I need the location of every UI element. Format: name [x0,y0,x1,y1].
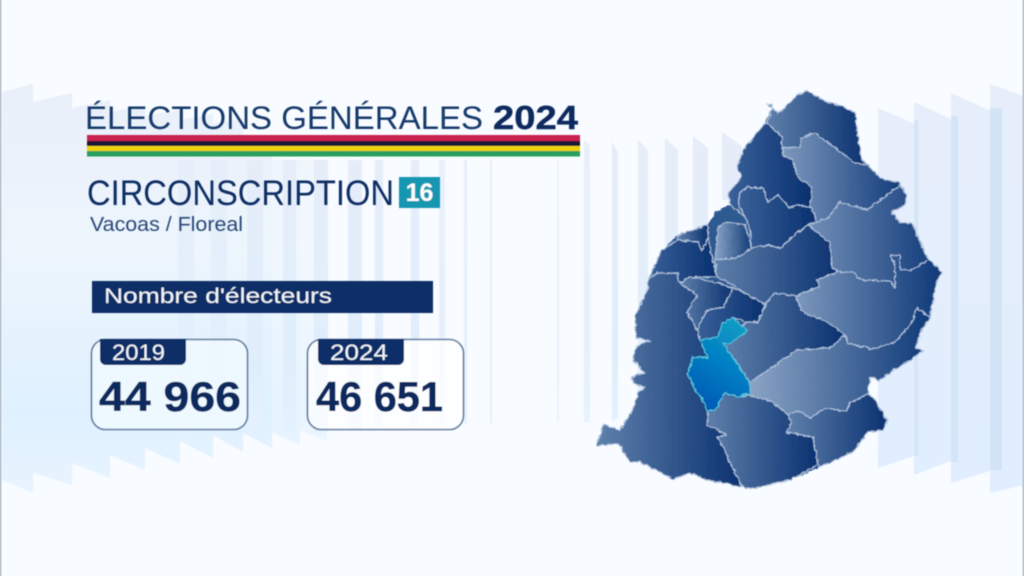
background strips: right [878,84,1024,493]
region: east [795,185,942,349]
region: south west [597,273,742,487]
river line [817,255,927,288]
island base silhouette [597,91,942,489]
card: 2024: 2024 [330,340,388,365]
title: 2024 [493,99,579,136]
region: north centre [782,133,907,222]
region: south east [787,393,887,467]
map of Mauritius [597,91,942,489]
region: Vacoas / Floreal highlighted [688,318,750,412]
region: south [707,393,818,489]
region: north west coast [648,237,717,283]
region: small north west [678,224,708,250]
region: port louis north [738,187,817,248]
region: centre [723,293,845,382]
flag stripes [87,135,580,156]
region: north [767,91,867,165]
region: port louis [715,222,752,260]
title: ÉLECTIONS GÉNÉRALES [85,100,483,136]
region: centre north [715,225,838,305]
region: dark centre west [697,288,765,340]
constituency number badge [399,177,440,208]
background strips: left [2,84,327,493]
region: west centre [680,277,733,330]
card: 2024 [308,339,464,430]
card: 2024: 46 651 [316,373,443,420]
voters heading bar: Nombre d'électeurs [104,285,332,308]
constituency number badge: 16 [406,179,433,207]
region: south east coast [750,308,930,418]
card: 2019: 2019 [112,340,165,365]
constituency heading: CIRCONSCRIPTION [87,174,394,213]
constituency name: Vacoas / Floreal [90,214,243,236]
voters heading bar [92,281,433,313]
card: 2019: 44 966 [99,373,241,420]
card: 2019 [92,339,248,430]
region: north west [728,123,812,217]
background strips: middle bars [178,132,742,440]
